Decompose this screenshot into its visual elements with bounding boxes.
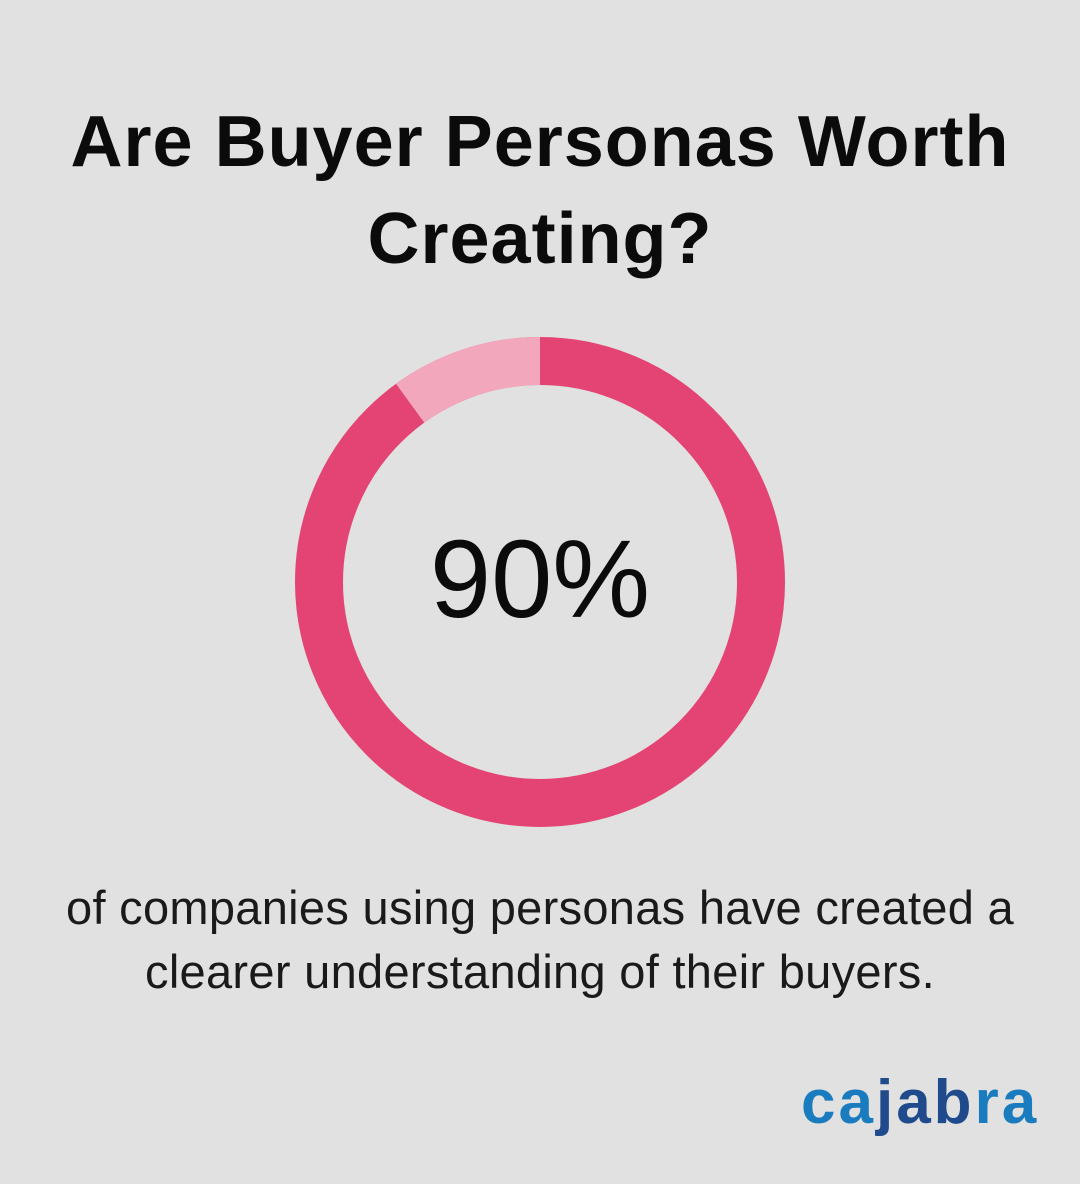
title [71, 102, 1009, 279]
title: Are Buyer Personas Worth [71, 102, 1009, 182]
title: Creating? [367, 199, 713, 279]
stat value: 90% [430, 518, 650, 641]
logo: cajabra [801, 1068, 1039, 1137]
caption: of companies using personas have created a [66, 881, 1014, 934]
caption [66, 881, 1014, 998]
caption: clearer understanding of their buyers. [145, 945, 935, 998]
